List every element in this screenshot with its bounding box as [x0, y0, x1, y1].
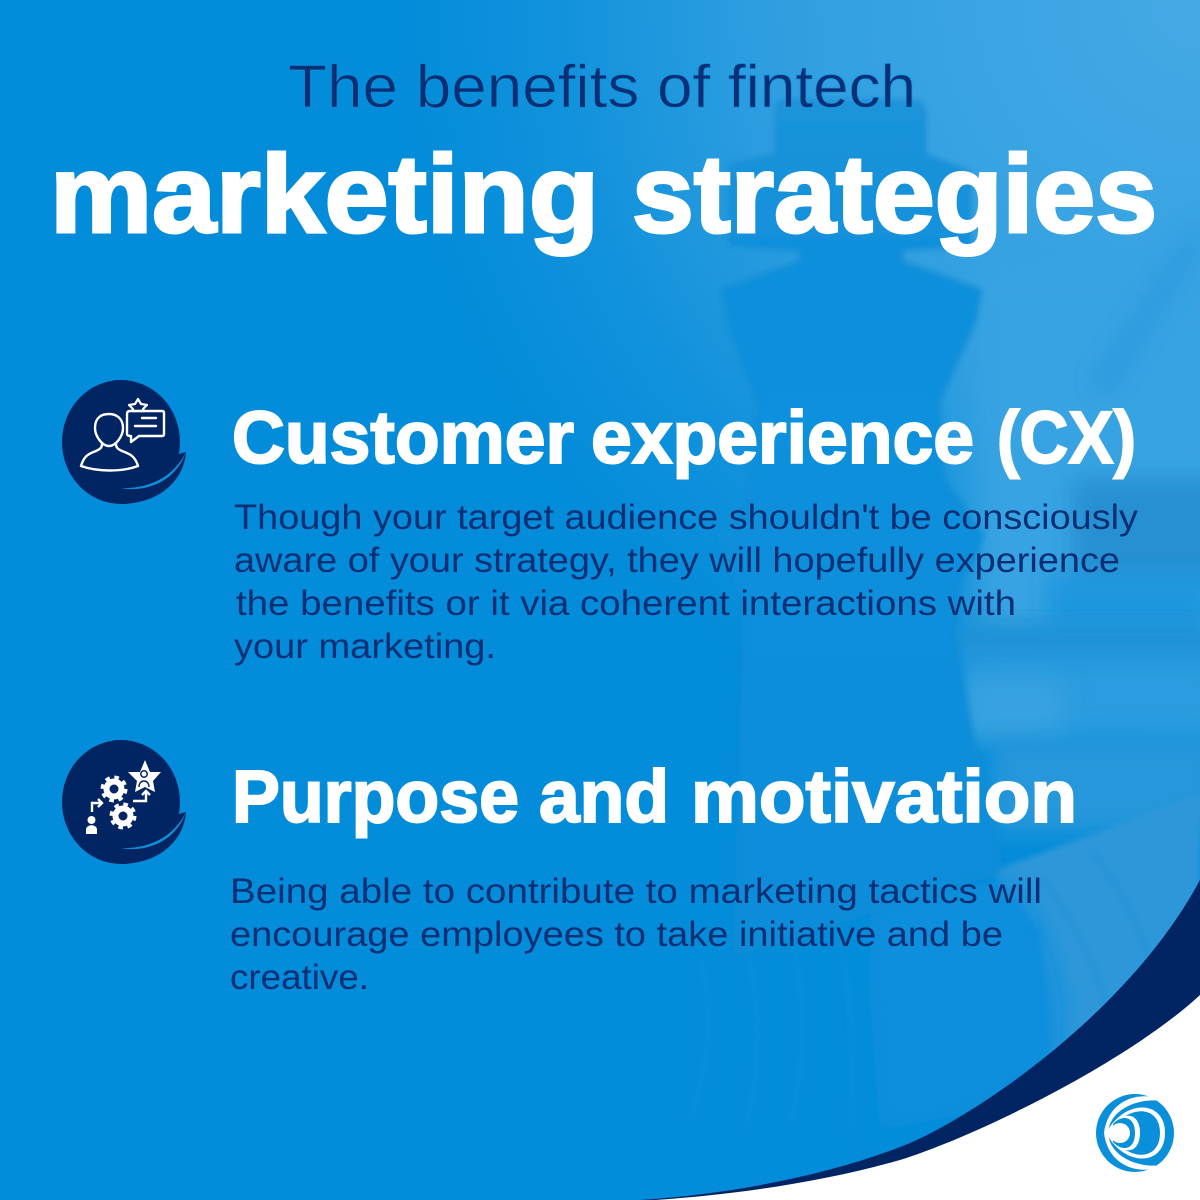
body text: creative.: [230, 958, 369, 997]
title: line two: strategies: [632, 133, 1157, 256]
heading: (CX): [997, 396, 1136, 479]
body text: [234, 498, 1139, 666]
heading: motivation: [691, 755, 1077, 838]
heading: and: [539, 755, 669, 838]
body text: [230, 872, 1042, 997]
section: purpose and motivation: [62, 740, 1077, 997]
heading: [232, 396, 1136, 479]
corner curve: navy band: [640, 880, 1200, 1200]
section: customer experience: [62, 380, 1139, 666]
title: line two: marketing: [50, 133, 599, 256]
logo: [1096, 1094, 1174, 1172]
heading: [232, 755, 1077, 838]
body text: Though your target audience shouldn't be consciously: [234, 498, 1139, 537]
heading: Purpose: [232, 755, 519, 838]
title: line one: The benefits of fintech: [288, 53, 916, 120]
icon: customer with speech bubble: [62, 380, 186, 504]
title: line two: [50, 133, 1157, 256]
body text: Being able to contribute to marketing tactics will: [230, 872, 1042, 911]
corner curve: white: [655, 995, 1200, 1200]
body text: encourage employees to take initiative and be: [230, 915, 1003, 954]
heading: Customer: [232, 396, 574, 479]
heading: experience: [591, 396, 974, 479]
body text: the benefits or it via coherent interactions with: [236, 584, 1016, 623]
body text: your marketing.: [234, 627, 496, 666]
background photo: chess pieces: [690, 101, 1200, 1130]
body text: aware of your strategy, they will hopefully experience: [234, 541, 1120, 580]
icon: person, gears and star: [62, 740, 186, 864]
